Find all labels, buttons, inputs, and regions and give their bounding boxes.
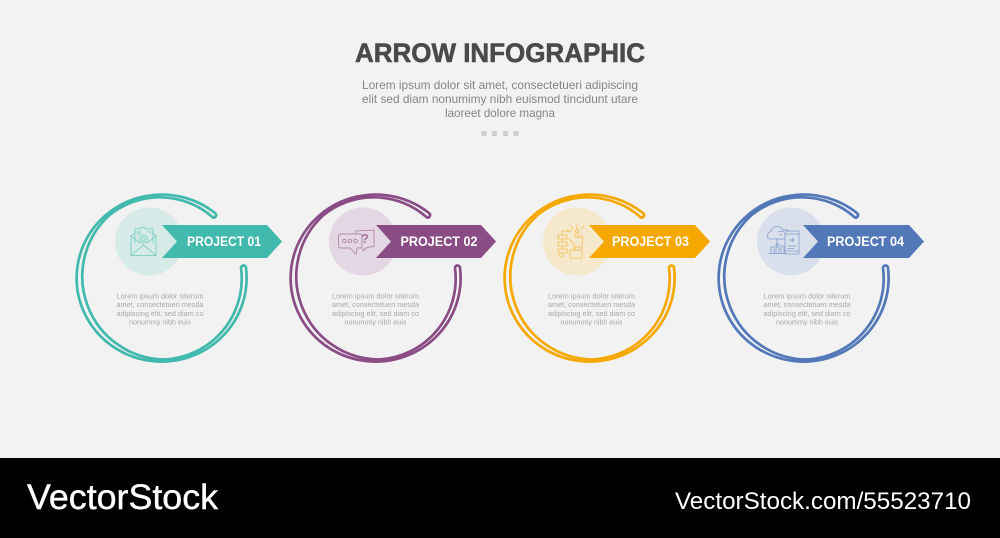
description: project 02: Lorem ipsum dolor siterum	[332, 292, 419, 300]
icon: open envelope	[131, 227, 156, 256]
arrow: project 03	[589, 225, 710, 258]
icon: speech bubbles: ?	[361, 231, 369, 246]
arrow label: project 04: PROJECT 04	[827, 234, 904, 249]
description: project 04: nonummy nibh euis	[776, 318, 838, 326]
arrow label: project 01: PROJECT 01	[187, 234, 261, 249]
description: project 04	[764, 292, 851, 326]
ring: project 04	[719, 195, 889, 362]
ring: project 01	[77, 195, 247, 362]
icon backdrop: project 01	[115, 208, 183, 276]
panel: project 02	[291, 195, 496, 362]
description: project 02	[332, 292, 419, 326]
subtitle text block	[362, 78, 638, 120]
arrow label: project 02: PROJECT 02	[400, 234, 478, 249]
description: project 04: Lorem ipsum dolor siterum	[764, 292, 851, 300]
description: project 03	[548, 292, 635, 326]
icon: cloud data and phone	[767, 226, 799, 254]
footer url: VectorStock.com/55523710	[675, 488, 971, 515]
description: project 03: Lorem ipsum dolor siterum	[548, 292, 635, 300]
footer logo: VectorStock	[27, 478, 219, 517]
description: project 01	[116, 292, 204, 326]
description: project 01: adipiscing elit, sed diam co	[116, 309, 204, 318]
panel: project 01	[77, 195, 282, 362]
icon: robot hand with flowchart	[558, 225, 584, 258]
description: project 03: nonummy nibh euis	[560, 318, 623, 326]
arrow: project 04	[803, 225, 924, 258]
panel: project 03	[505, 195, 710, 362]
subtitle text block: Lorem ipsum dolor sit amet, consectetueri adipiscing	[362, 78, 638, 92]
description: project 01: nonummy nibh euis	[129, 318, 191, 326]
pagination dots	[482, 131, 518, 136]
ring: project 02	[291, 195, 461, 362]
title: ARROW INFOGRAPHIC	[355, 38, 645, 68]
panel: project 04	[719, 195, 924, 362]
description: project 03: amet, consectetueri mesda	[548, 300, 635, 309]
description: project 04: adipiscing elit, sed diam co	[764, 309, 850, 318]
description: project 02: nonummy nibh euis	[344, 318, 407, 326]
description: project 03: adipiscing elit, sed diam co	[548, 309, 635, 318]
subtitle text block: elit sed diam nonumimy nibh euismod tincidunt utare	[362, 92, 638, 106]
description: project 04: amet, consectetueri mesda	[764, 300, 850, 309]
subtitle text block: laoreet dolore magna	[445, 106, 555, 120]
description: project 01: amet, consectetueri mesda	[116, 300, 204, 309]
ring: project 03	[505, 195, 675, 362]
icon backdrop: project 04	[757, 208, 825, 276]
footer bar	[0, 458, 1000, 538]
arrow label: project 03: PROJECT 03	[612, 234, 689, 249]
icon: speech bubbles	[338, 230, 374, 254]
description: project 02: adipiscing elit, sed diam co	[332, 309, 419, 318]
icon backdrop: project 03	[543, 208, 611, 276]
arrow: project 01	[162, 225, 282, 258]
description: project 01: Lorem ipsum dolor siterum	[116, 292, 204, 300]
description: project 02: amet, consectetueri mesda	[332, 300, 419, 309]
arrow: project 02	[376, 225, 496, 258]
icon backdrop: project 02	[329, 208, 397, 276]
